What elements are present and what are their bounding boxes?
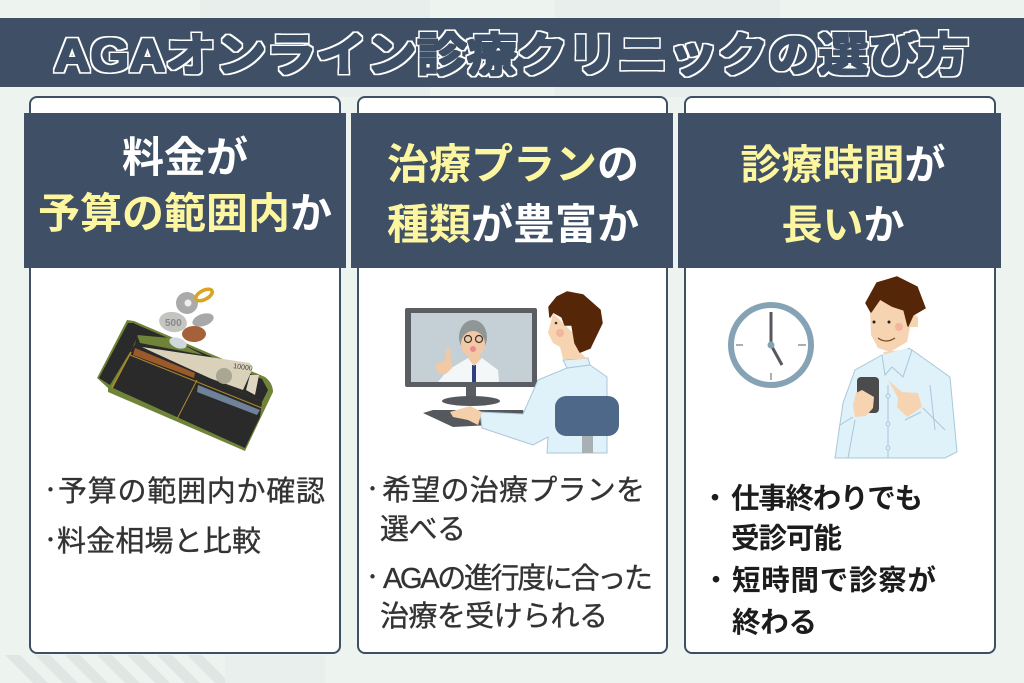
- panel: hours: [678, 97, 1001, 653]
- bullet text: hours: ・: [702, 483, 728, 513]
- bullet text: plans: [364, 474, 653, 633]
- title: AGAオンライン診療クリニックの選び方: [54, 29, 969, 81]
- bullet text: plans: AGAの進行度に合った: [383, 562, 653, 595]
- bullet text: price: [42, 475, 325, 558]
- bullet text: plans: 希望の治療プランを: [382, 474, 645, 507]
- panel heading: price: 予算の範囲内か: [38, 180, 332, 241]
- bullet text: hours: 短時間で診察が: [732, 564, 936, 597]
- bullet text: price: 料金相場と比較: [57, 525, 261, 558]
- bullet text: hours: [702, 483, 936, 639]
- panel: plans: [351, 97, 673, 653]
- bullet text: plans: 治療を受けられる: [380, 600, 608, 633]
- panel heading: plans: 種類が豊富か: [387, 191, 639, 252]
- panel heading: plans: [351, 113, 673, 268]
- bullet text: hours: 仕事終わりでも: [731, 483, 923, 515]
- bullet text: price: ・: [42, 531, 59, 550]
- bullet text: hours: 受診可能: [731, 523, 842, 555]
- bullet text: plans: ・: [364, 480, 381, 499]
- bullet text: hours: 終わる: [732, 607, 817, 639]
- bullet text: hours: ・: [703, 565, 729, 595]
- panel heading: hours: [678, 113, 1001, 268]
- doctor on screen: [435, 320, 499, 382]
- panel heading: price: [24, 113, 346, 268]
- icon: man in online consultation with doctor: [405, 292, 619, 453]
- bullet text: price: 予算の範囲内か確認: [58, 475, 325, 508]
- panel heading: price: 料金が: [122, 124, 248, 185]
- panel heading: plans: 治療プランの: [387, 131, 639, 192]
- bullet text: plans: 選べる: [380, 514, 466, 546]
- bullet text: plans: ・: [364, 568, 381, 587]
- icon: wallet with coins: 500: [165, 318, 182, 329]
- panel heading: hours: 診療時間が: [740, 131, 946, 191]
- icon: clock: [731, 305, 811, 385]
- panel heading: hours: 長いか: [782, 191, 904, 251]
- icon: wallet with coins: 10000: [233, 363, 253, 373]
- panel: price: [24, 97, 346, 653]
- title band: [0, 18, 1024, 87]
- icon: man with smartphone: [835, 277, 957, 458]
- bullet text: price: ・: [42, 481, 59, 500]
- icon: wallet with coins: [97, 287, 273, 451]
